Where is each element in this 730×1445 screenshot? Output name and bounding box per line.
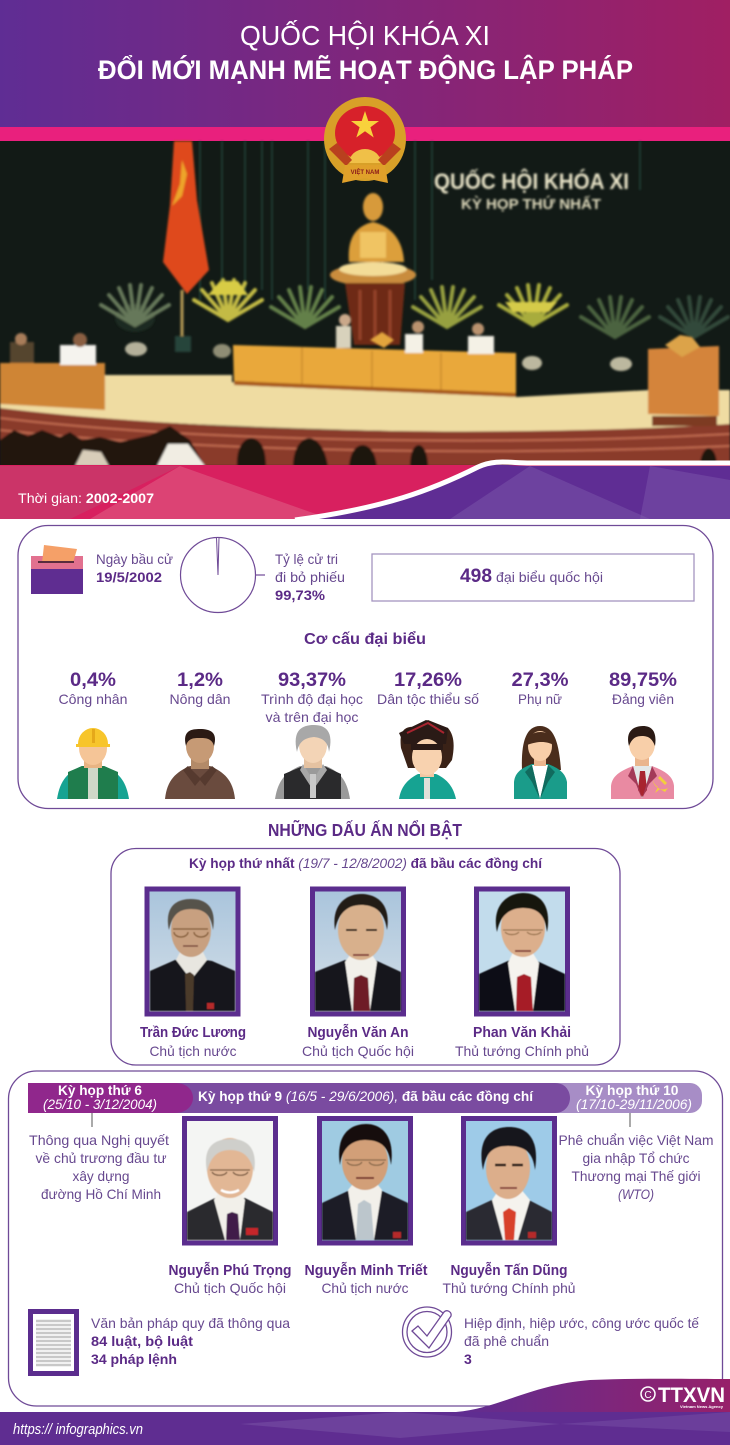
stat: ethnic minorities: Dân tộc thiểu số — [377, 691, 479, 707]
state emblem — [324, 97, 406, 183]
treaties ratified: Hiệp định, hiệp ước, công ước quốc tế — [464, 1315, 699, 1331]
stat: party members — [609, 670, 677, 707]
turnout text: Tỷ lệ cử tri — [275, 551, 338, 567]
title: QUỐC HỘI KHÓA XI — [240, 19, 490, 51]
caption: Nguyễn Minh Triết — [304, 1262, 428, 1296]
stat: workers — [58, 670, 128, 707]
title — [98, 19, 633, 85]
caption: Nguyễn Tấn Dũng — [442, 1262, 576, 1296]
treaties ratified — [464, 1315, 699, 1367]
side tables — [0, 363, 105, 410]
caption: Nguyễn Tấn Dũng: Thủ tướng Chính phủ — [442, 1280, 576, 1296]
caption: Trần Đức Lương: Chủ tịch nước — [150, 1043, 236, 1059]
stat: workers: 0,4% — [70, 670, 116, 691]
session heading: Kỳ họp thứ nhất (19/7 - 12/8/2002) đã bầu các đồng chí — [189, 855, 543, 871]
logo: TTXVN: C — [644, 1390, 652, 1401]
icon: party member — [611, 726, 674, 799]
session 6 note: về chủ trương đầu tư — [36, 1150, 166, 1166]
laws passed — [91, 1315, 290, 1367]
stat: party members: 89,75% — [609, 670, 677, 691]
session 6 note: Thông qua Nghị quyết — [29, 1132, 169, 1148]
panel: later sessions — [8, 1071, 722, 1406]
session 10 note: (WTO) — [618, 1186, 654, 1202]
caption: Trần Đức Lương — [140, 1025, 246, 1059]
url: https:// infographics.vn — [13, 1421, 143, 1438]
stat: farmers: Nông dân — [170, 691, 230, 707]
presiding table — [233, 345, 516, 397]
laws passed: 34 pháp lệnh — [91, 1351, 177, 1367]
deputies box: 498 đại biểu quốc hội — [460, 566, 603, 587]
icon: worker — [57, 728, 129, 799]
icon: senior man — [275, 725, 350, 799]
caption: Nguyễn Minh Triết: Chủ tịch nước — [322, 1280, 408, 1296]
icon: ethnic woman — [399, 720, 456, 799]
caption: Nguyễn Phú Trọng: Nguyễn Phú Trọng — [168, 1262, 292, 1279]
laws passed: Văn bản pháp quy đã thông qua — [91, 1315, 290, 1331]
logo: TTXVN: TTXVN — [658, 1384, 725, 1407]
election date: Ngày bầu cử — [96, 551, 173, 567]
panel: first session — [111, 848, 620, 1065]
icon: farmer — [165, 729, 235, 799]
caption: Nguyễn Minh Triết: Nguyễn Minh Triết — [304, 1262, 428, 1279]
session 10 note: Thương mại Thế giới — [572, 1168, 700, 1184]
stat: education: và trên đại học — [266, 709, 358, 725]
portrait: Nguyễn Phú Trọng — [184, 1118, 276, 1243]
icon: woman — [514, 726, 567, 799]
caption: Nguyễn Phú Trọng: Chủ tịch Quốc hội — [174, 1280, 286, 1296]
stat: education: Trình độ đại học — [261, 691, 363, 707]
stat: education — [261, 670, 363, 725]
floor — [0, 375, 730, 433]
hall text: session banner: QUỐC HỘI KHÓA XI — [434, 168, 629, 194]
time band — [0, 462, 730, 520]
session 10 label: (17/10-29/11/2006) — [576, 1097, 692, 1112]
time text: Thời gian: 2002-2007 — [18, 490, 154, 506]
election date: 19/5/2002 — [96, 569, 162, 585]
caption: Nguyễn Văn An — [302, 1024, 414, 1059]
session 10 note — [558, 1132, 714, 1202]
pie chart: turnout — [180, 538, 265, 612]
caption: Phan Văn Khải: Phan Văn Khải — [473, 1025, 571, 1041]
session 10 note: Phê chuẩn việc Việt Nam — [558, 1132, 714, 1148]
stat: education: 93,37% — [278, 670, 346, 691]
icon: document — [30, 1312, 76, 1374]
turnout text — [275, 551, 345, 603]
session 6 label: Kỳ họp thứ 6 — [58, 1083, 142, 1098]
caption: Phan Văn Khải: Thủ tướng Chính phủ — [455, 1043, 589, 1059]
caption: Phan Văn Khải — [455, 1025, 589, 1059]
logo: TTXVN: Vietnam News Agency — [680, 1404, 724, 1409]
treaties ratified: 3 — [464, 1351, 472, 1367]
stat: ethnic minorities — [377, 670, 479, 707]
caption: Nguyễn Văn An: Nguyễn Văn An — [308, 1024, 408, 1041]
stat: women — [512, 670, 569, 707]
session 6 note — [29, 1132, 169, 1202]
timeline bar — [28, 1083, 702, 1113]
caption: Trần Đức Lương: Trần Đức Lương — [140, 1025, 246, 1041]
session 6 label: (25/10 - 3/12/2004) — [43, 1097, 157, 1112]
stat: women: 27,3% — [512, 670, 569, 691]
audience — [0, 426, 205, 467]
portrait: Nguyễn Tấn Dũng — [464, 1118, 554, 1243]
header band — [0, 0, 730, 141]
turnout text: đi bỏ phiếu — [275, 569, 345, 585]
session 10 note: gia nhập Tổ chức — [582, 1150, 690, 1166]
stat: party members: Đảng viên — [612, 691, 674, 707]
icon: check mark — [402, 1307, 452, 1357]
stat: farmers — [170, 670, 230, 707]
treaties ratified: đã phê chuẩn — [464, 1333, 549, 1349]
deputies box — [372, 554, 694, 601]
heading: highlights: NHỮNG DẤU ẤN NỔI BẬT — [268, 819, 462, 840]
photo: assembly hall — [0, 141, 730, 467]
hall text: session banner: KỲ HỌP THỨ NHẤT — [461, 195, 601, 213]
election date — [96, 551, 173, 585]
plants — [101, 280, 728, 371]
stat: workers: Công nhân — [58, 691, 128, 707]
footer — [0, 1379, 730, 1445]
session 6 label — [43, 1083, 157, 1112]
state emblem: VIỆT NAM — [351, 168, 379, 176]
panel: election overview — [18, 526, 713, 808]
caption: Nguyễn Tấn Dũng: Nguyễn Tấn Dũng — [450, 1262, 568, 1279]
session 9 label: Kỳ họp thứ 9 (16/5 - 29/6/2006), đã bầu các đồng chí — [198, 1088, 534, 1104]
title: ĐỔI MỚI MẠNH MẼ HOẠT ĐỘNG LẬP PHÁP — [98, 54, 633, 85]
caption: Nguyễn Văn An: Chủ tịch Quốc hội — [302, 1043, 414, 1059]
stat: ethnic minorities: 17,26% — [394, 670, 462, 691]
portrait: Phan Văn Khải — [476, 889, 568, 1014]
caption: Nguyễn Phú Trọng — [168, 1262, 292, 1296]
portrait: Nguyễn Văn An — [312, 889, 404, 1014]
portrait: Nguyễn Minh Triết — [320, 1118, 410, 1243]
session 10 label — [576, 1083, 692, 1112]
portrait: Trần Đức Lương — [147, 889, 238, 1014]
laws passed: 84 luật, bộ luật — [91, 1333, 193, 1349]
turnout text: 99,73% — [275, 587, 326, 603]
session 6 note: xây dựng — [72, 1168, 130, 1184]
stat: farmers: 1,2% — [177, 670, 223, 691]
stat: women: Phụ nữ — [518, 691, 562, 707]
session 10 label: Kỳ họp thứ 10 — [586, 1083, 678, 1098]
heading: structure: Cơ cấu đại biểu — [304, 630, 426, 648]
hall text: session banner — [434, 168, 629, 213]
session 6 note: đường Hồ Chí Minh — [41, 1186, 161, 1202]
icon: ballot box — [31, 545, 83, 594]
